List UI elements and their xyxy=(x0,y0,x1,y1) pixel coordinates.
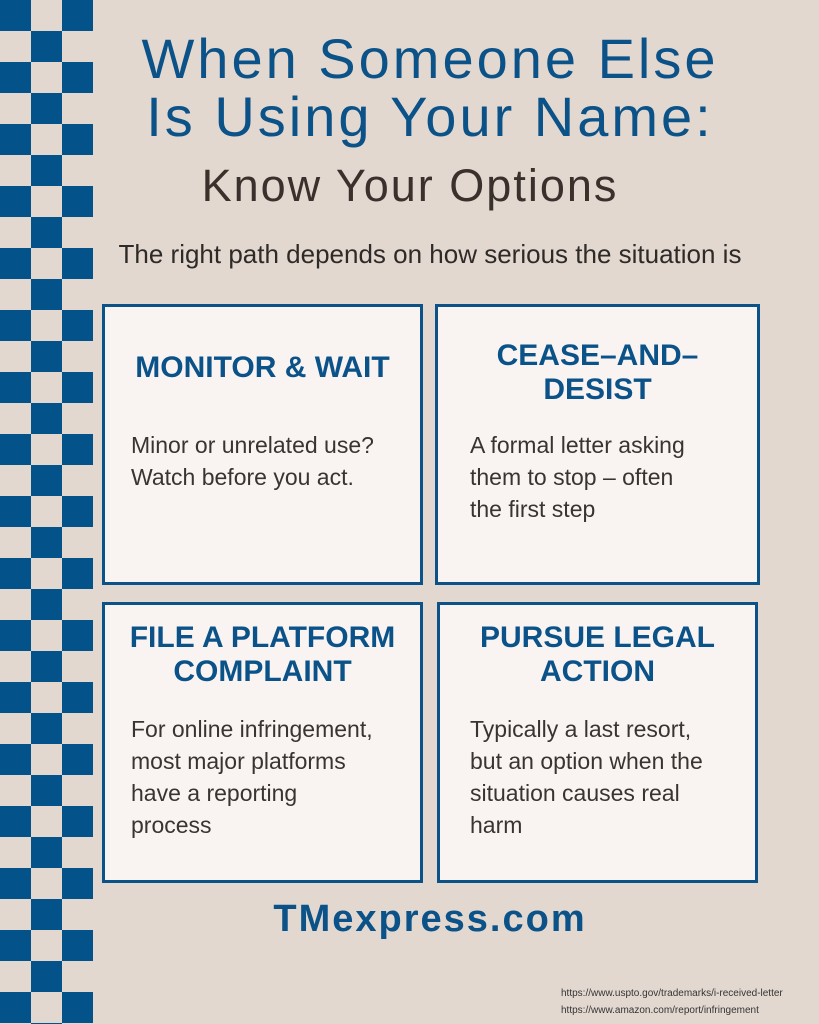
heading: cease: CEASE–AND– xyxy=(497,339,698,372)
panel: legal xyxy=(437,602,758,883)
website: TMexpress.com xyxy=(273,898,587,940)
heading: platform: COMPLAINT xyxy=(173,655,352,688)
heading: monitor: MONITOR & WAIT xyxy=(135,351,390,384)
heading: platform: FILE A PLATFORM xyxy=(130,621,395,654)
heading: legal: ACTION xyxy=(540,655,655,688)
panel: cease xyxy=(435,304,760,585)
text: platform: For online infringement, most major platforms have a reporting process xyxy=(131,716,373,838)
panel: platform xyxy=(102,602,423,883)
heading: platform xyxy=(130,621,395,688)
subtitle heading: Know Your Options xyxy=(202,160,618,211)
title: When Someone Else xyxy=(141,27,719,90)
title: Is Using Your Name: xyxy=(146,85,714,148)
text: monitor: Minor or unrelated use? Watch before you act. xyxy=(131,432,374,490)
title xyxy=(141,27,719,148)
heading: legal xyxy=(480,621,715,688)
text: cease: A formal letter asking them to stop – often the first step xyxy=(470,432,685,522)
heading: legal: PURSUE LEGAL xyxy=(480,621,715,654)
sources: https://www.amazon.com/report/infringement xyxy=(561,1005,759,1016)
heading: cease xyxy=(497,339,698,406)
sources xyxy=(561,988,783,1016)
heading: cease: DESIST xyxy=(543,373,652,406)
text: legal: Typically a last resort, but an option when the situation causes real harm xyxy=(470,716,703,838)
intro text: The right path depends on how serious the situation is xyxy=(119,239,741,269)
checker pattern xyxy=(0,0,93,1024)
panel: monitor xyxy=(102,304,423,585)
sources: https://www.uspto.gov/trademarks/i-received-letter xyxy=(561,988,783,999)
